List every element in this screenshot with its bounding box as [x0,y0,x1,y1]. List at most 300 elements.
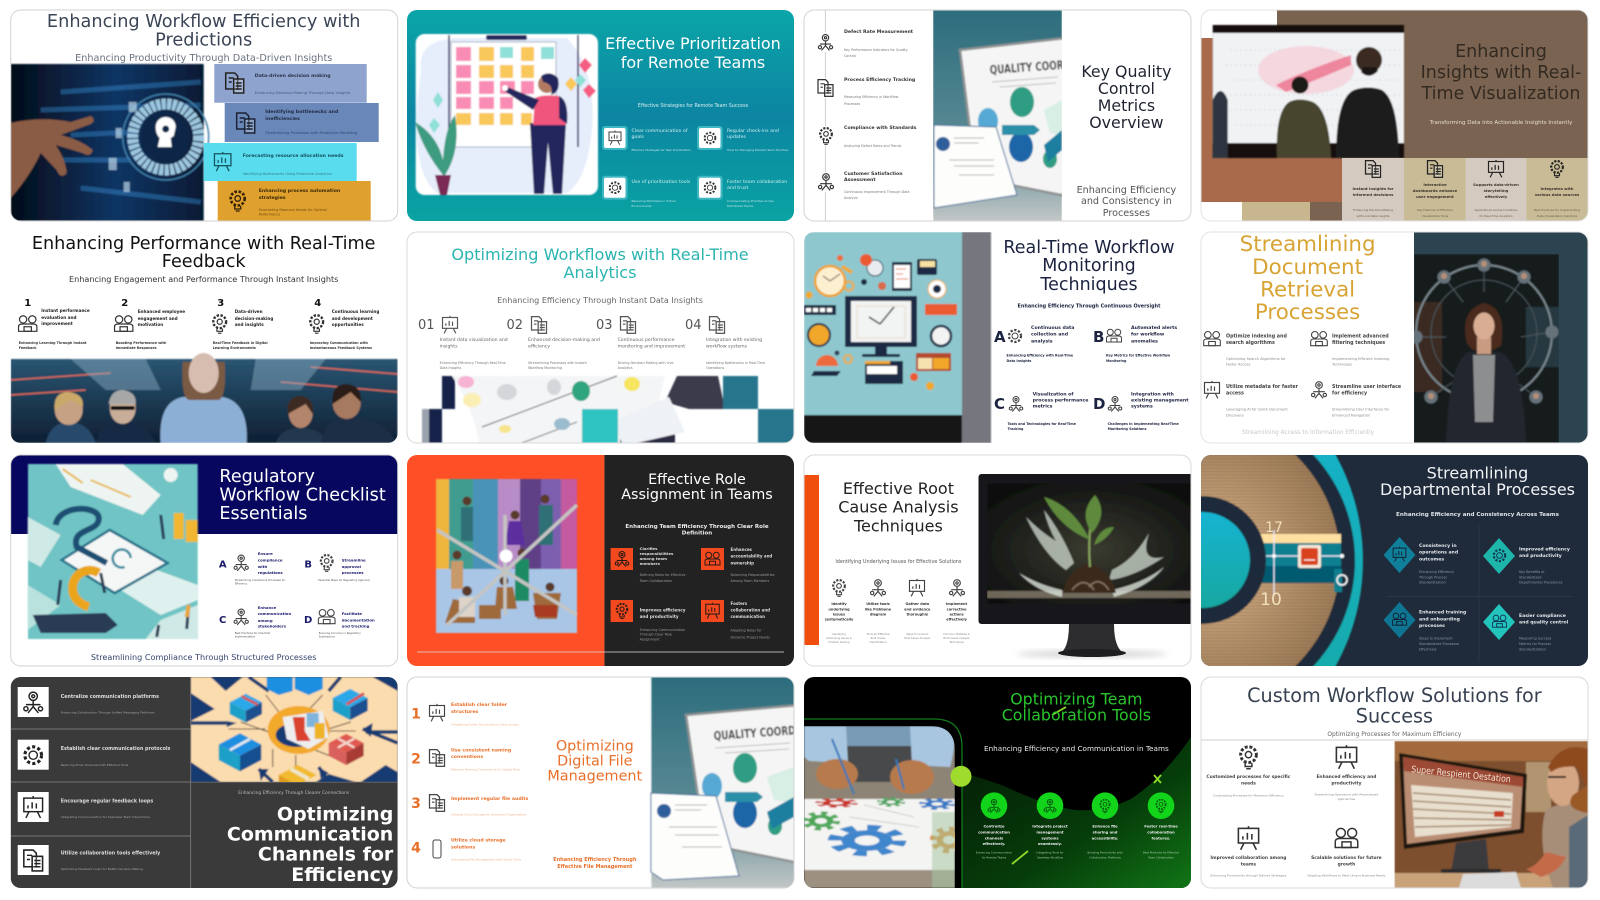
metric: customer satisfaction [816,171,910,200]
feature: data-driven storytelling: for Real-Time Analytics [1479,214,1513,218]
item: user interface [1312,382,1402,418]
illustration: clocks and monitor [804,232,991,443]
image: hand and AI circle [11,64,209,221]
step 03: Analytics [618,366,633,370]
item: fosters collaboration: collaboration and [730,608,770,613]
item 4: continuous learning: opportunities [332,322,364,327]
step: forecasting: Identifying Bottlenecks Using Predictive Analytics [243,172,332,176]
title: Optimizing [556,738,634,754]
step 04 [685,317,765,370]
subtitle: Processes [1103,208,1150,219]
step: forecasting: Forecasting resource allocation needs [243,153,344,159]
step: corrective actions: effectively [946,617,968,621]
item: indexing [1204,332,1287,367]
image: quality coordinator certificates [933,10,1066,221]
step 04: Integration with existing [706,337,762,343]
item 1: folder structures: Establish clear folder [451,702,508,708]
title: Enhancing Performance with Real-Time [32,234,375,254]
solution: scalable growth [1307,828,1386,878]
feature: data-driven storytelling: storytelling [1484,188,1509,193]
item B: approval [342,564,361,569]
item C: communication [258,611,291,616]
item D [1093,392,1189,431]
item: training: Steps to Implement [1419,637,1453,641]
item C: Tools and Technologies for Real-Time [1008,422,1077,426]
item A: Streamlining Compliance Processes for [235,578,286,582]
solution: scalable growth: Scalable solutions for future [1311,855,1382,861]
item: clarifies responsibilities: Defining Roles for Effective [640,573,686,577]
metric: customer satisfaction: Analysis [844,196,858,200]
monitor screen caption: Super Respient Oestation [1411,765,1511,785]
item 1: performance evaluation: improvement [41,321,73,326]
step 02 [506,317,600,370]
feature: various data sources: Data Visualization Solutions [1537,214,1578,218]
step: automation: Forecasting Resource Needs for Optimal [259,208,327,212]
channel: collaboration tools: Utilize collaboration tools effectively [61,850,161,856]
item: training: Enhanced training [1419,610,1466,616]
title: Real-Time Workflow [1003,238,1175,258]
step 02: Workflow Monitoring [528,366,562,370]
item D: D [304,615,312,626]
tool: enhance file sharing: Boosting Productivity with [1087,851,1123,855]
feature: interactive dashboards: Visualization Tools [1422,214,1449,218]
feature: various data sources [1526,158,1588,221]
item 1: folder structures: structures [451,709,479,715]
step: identify issues: issues [833,612,845,616]
feature: instant insights: Enhancing Decision-Making [1353,208,1393,212]
metric: defect rate: Control [844,54,856,58]
item 2: naming conventions: Effective Naming Conventions for Digital Files [451,768,520,772]
item: prioritization tools [602,176,691,208]
item: user interface: Streamline user interface [1332,384,1402,390]
item: user interface: for efficiency [1332,391,1368,397]
item: improves efficiency: Through Clear Role [639,633,672,637]
feature: interactive dashboards [1404,158,1466,221]
image: woman in data network [1410,254,1559,443]
step: data-driven decision making: Enhancing Decision-Making Through Data Insights [255,90,350,95]
item: clarifies responsibilities: members [640,561,661,566]
subtitle: Enhancing Efficiency Through Instant Data Insights [497,296,703,305]
item 3: data-driven insights: Learning Environments [213,346,256,350]
item 2: employee engagement: engagement and [138,316,178,321]
title: Optimizing Workflows with Real-Time [451,245,749,264]
step: bottlenecks: inefficiencies [265,116,300,122]
step: corrective actions [943,580,970,644]
item A: Ensure [258,551,273,556]
item: filtering: Techniques [1331,363,1352,367]
item B: Automated alerts [1131,325,1177,331]
title: Key Quality [1081,62,1171,81]
item 2: naming conventions: Use consistent naming [451,747,511,753]
item 4: cloud storage: solutions [451,844,475,850]
panel: real-time analytics slide [407,232,794,443]
item D: Challenges in Implementing Real-Time [1108,422,1180,426]
step: fishbone [865,580,892,644]
divider line [417,651,784,653]
panel: custom workflow solutions slide [1201,677,1588,888]
item B: Monitoring [1106,359,1127,363]
item: prioritization tools: Balancing Workloads in Virtual [632,199,676,203]
item B [304,555,370,582]
item: consistency: Enhancing Efficiency [1419,570,1454,574]
feature: various data sources: Best Practices for Implementing [1534,208,1580,212]
title: Essentials [219,504,307,524]
item: improves efficiency: and productivity [640,614,679,619]
item: clear communication: goals [632,134,645,140]
feature: interactive dashboards: dashboards enhance [1413,188,1458,193]
title: Control [1098,79,1155,98]
image: quality coordinator certificates: QUALITY COORD [713,723,796,743]
step 02: efficiency [528,344,550,350]
item 1: performance evaluation: Feedback [19,346,37,350]
graphic: wooden dial with teal rings [927,342,1363,778]
item C: Best Practices for Checklist [235,631,270,635]
item: fosters collaboration: communication [730,614,765,619]
item 1: folder structures: Simplifying Folder Structures for Easy Access [451,723,519,727]
step 04: workflow systems [706,344,748,350]
item 3: data-driven insights: 3 [217,298,224,309]
image: team watching holographic displays [11,353,398,443]
item B [1093,325,1177,363]
step: identify issues: underlying [828,607,850,611]
item 2: employee engagement: Enhanced employee [138,309,185,314]
item: user interface: Streamlining User Interfaces for [1332,407,1390,411]
dial labels: 10 [1260,590,1282,610]
step 02: Streamlining Processes with Instant [528,361,588,365]
title: Feedback [162,252,246,272]
panel: departmental processes slide [927,342,1588,778]
step: data-driven decision making: Data-driven decision making [255,73,331,79]
step 02: 02 [506,318,523,333]
item C: C [994,395,1005,413]
step 01: insights [440,344,458,350]
solution: scalable growth: growth [1338,861,1355,867]
item C: metrics [1033,404,1053,410]
solution: enhanced efficiency: Streamlining Operations with Personalized [1315,793,1378,797]
channel: communication protocols [18,740,171,770]
item: team collaboration: and trust [727,185,748,191]
step: fishbone: like Fishbone [865,607,892,611]
item 3: file audits [411,795,529,817]
item: clear communication: Effective Strategies for Task Prioritization [632,148,691,152]
panel: real-time feedback slide [11,232,398,443]
panel: document retrieval slide [1201,232,1588,443]
tool: real-time collaboration: Team Collaboration [1147,855,1174,859]
item: accountability: accountability and [730,554,772,559]
item B: B [1093,328,1104,346]
item: regular check-ins: Tools for Managing Remote Team Priorities [726,148,789,152]
step: gather evidence: thoroughly [906,612,929,616]
item D: Monitoring Solutions [1108,427,1147,431]
item B: anomalies [1131,338,1158,344]
step: automation: strategies [259,195,286,201]
subtitle: Enhancing Efficiency Through [553,857,637,863]
step: data-driven decision making [214,64,367,103]
item: compliance: Measuring Success [1519,637,1552,641]
item 4: cloud storage [411,838,521,862]
title: for Remote Teams [621,53,765,72]
solution: improved collaboration: Improved collaboration among [1210,855,1286,861]
tool: integrate project systems [1032,792,1068,859]
step 03: Continuous performance [618,337,675,343]
tool: integrate project systems: Integrating Tools for [1037,851,1064,855]
title: Monitoring [1042,256,1136,276]
feature: data-driven storytelling [1466,158,1526,221]
step: fishbone: diagram [870,612,887,616]
item 1: folder structures: 1 [411,706,421,722]
item A: Data Insights [1006,359,1031,363]
step: gather evidence: Ways to Conduct [906,632,928,636]
item B: Key Metrics for Effective Workflow [1106,354,1170,358]
title: Processes [1255,300,1360,325]
step: gather evidence: and evidence [904,607,931,611]
item B: Streamline [342,558,366,563]
item: consistency: Through Process [1418,575,1447,579]
subtitle: Identifying Underlying Issues for Effective Solutions [835,559,962,565]
item: clarifies responsibilities [611,546,686,583]
title: Channels for [258,844,394,866]
item 1: performance evaluation [19,298,90,350]
item 4: continuous learning: Continuous learning [332,309,379,314]
feature: data-driven storytelling: Supports data-driven [1473,182,1519,187]
item D: and tracking [342,624,370,629]
metric: customer satisfaction: Continuous Improvement Through Data [844,190,910,194]
item 4: continuous learning: and development [332,316,373,321]
panel: root cause analysis slide [804,455,1208,666]
item: training: and onboarding [1419,616,1460,622]
item: clarifies responsibilities: Team Collaboration [639,579,672,583]
metric: defect rate: Defect Rate Measurement [844,29,914,35]
tool: real-time collaboration: collaboration [1147,830,1175,834]
item B: processes [342,570,364,575]
item A: Continuous data [1031,325,1074,331]
item: filtering: Implementing Efficient Indexing [1332,357,1389,361]
item A: collection and [1031,332,1068,338]
step: identify issues: Identify [831,602,847,606]
item C [994,392,1088,431]
item D: D [1093,395,1105,413]
step 03 [596,317,685,370]
channel: centralize platforms [18,687,159,717]
illustration: person at sticky board [415,34,598,195]
item: prioritization tools: Environments [632,204,652,208]
item: consistency [1384,537,1458,585]
solution: customized processes [1206,747,1291,798]
item A: with [258,564,267,569]
subtitle: Definition [682,531,712,537]
item: accountability: Balancing Responsibilities [730,573,775,577]
step: gather evidence [904,579,931,640]
image: man at monitor in workshop [1394,741,1588,888]
step: forecasting [204,143,357,181]
item: prioritization tools: Use of prioritization tools [632,179,691,185]
title: Success [1356,704,1433,727]
feature: data-driven storytelling: effectively [1485,194,1508,199]
title: Document [1252,255,1363,280]
item 2: employee engagement: 2 [121,298,128,309]
panel: workflow predictions slide [11,10,398,221]
step: corrective actions: corrective [947,607,967,611]
item 1: folder structures [411,702,519,727]
title: Predictions [155,30,252,50]
metric: compliance: Compliance with Standards [844,125,917,131]
item: clear communication [602,126,691,152]
item: training: Standardized Processes [1419,642,1459,646]
subtitle: Optimizing Processes for Maximum Efficiency [1327,732,1462,738]
item 3: data-driven insights: decision-making [235,316,273,321]
image: quality coordinator certificates: QUALITY COOR [989,58,1064,77]
item 2: employee engagement: motivation [138,322,163,327]
metric: customer satisfaction: Assessment [844,177,876,183]
channel: feedback loops [18,792,153,822]
item: filtering: Implement advanced [1332,333,1389,339]
metric: defect rate [816,29,914,58]
solution: enhanced efficiency: Enhanced efficiency and [1316,774,1376,780]
item D: Ensuring Accuracy in Regulatory [319,631,361,635]
item 1: performance evaluation: 1 [24,298,31,309]
title: Assignment in Teams [621,487,773,503]
step 01: Enhancing Efficiency Through Real-Time [440,361,506,365]
channel: feedback loops: Integrating Communication for Seamless Team Interactions [61,815,150,819]
panel: key quality control metrics slide [804,10,1191,221]
title: Streamlining [1240,232,1376,257]
panel: workflow monitoring slide [804,232,1191,443]
title: Techniques [1039,275,1138,295]
item D: systems [1131,404,1153,410]
title: Analytics [563,263,637,282]
panel: team collaboration tools slide [804,677,1191,888]
item: metadata: Discovery [1226,414,1245,418]
feature: instant insights: Instant insights for [1352,186,1394,191]
tool: enhance file sharing: accessibility. [1092,836,1119,840]
item D: documentation [342,618,375,622]
tool: enhance file sharing: Collaboration Platforms [1089,855,1121,859]
item C [219,605,291,638]
item C: Tracking [1008,427,1024,431]
channel: feedback loops: Encourage regular feedback loops [61,798,153,804]
feature: interactive dashboards: Key Features of Effective [1417,208,1453,212]
item 2: naming conventions: conventions [451,754,483,760]
metric: process efficiency: Measuring Efficiency in Workflow [844,95,899,99]
channel: communication protocols: Reducing Email Overload with Effective Tools [61,763,129,767]
item: metadata: Utilize metadata for faster [1226,384,1299,390]
subtitle: Effective File Management [557,864,633,870]
subtitle: Enhancing Efficiency and Consistency Across Teams [1396,512,1560,518]
feature: various data sources: various data sources [1535,192,1580,197]
metric: process efficiency: Processes [844,102,861,106]
tagline: Streamlining Compliance Through Structured Processes [91,652,317,662]
item: accountability: Enhances [730,547,753,552]
title: Overview [1089,113,1164,132]
item C: among [258,618,273,623]
item 4: continuous learning: 4 [314,298,321,309]
item C: process performance [1033,398,1088,404]
item: team collaboration: Foster team collaboration [727,179,787,185]
title: Optimizing Team [1010,690,1143,709]
step: identify issues [825,580,854,644]
step: gather evidence: Gather data [905,602,930,606]
title: Effective Prioritization [605,34,781,53]
metric: compliance: Analyzing Defect Rates and Trends [844,144,902,148]
image: quality coordinator certificates [651,677,799,888]
title: Enhancing [1455,42,1547,62]
step: fishbone: Root Cause [871,636,886,640]
item D: existing management [1131,398,1189,404]
solution: customized processes: Customized processes for specific [1206,774,1291,780]
step: bottlenecks: Streamlining Processes with Predictive Modeling [265,130,358,135]
channel: communication protocols: Establish clear communication protocols [61,746,171,752]
step: automation [218,181,371,221]
item: user interface: Enhanced Navigation [1332,414,1370,418]
item A: A [994,328,1006,346]
tool: centralize channels: for Remote Teams [982,855,1007,859]
tool: centralize channels: channels [985,836,1004,840]
subtitle: Enhancing Efficiency and Communication in Teams [984,744,1169,753]
image: monitor with plant [978,474,1208,658]
step 01: Data Insights [440,366,462,370]
item 3: file audits: 3 [411,796,421,812]
title: Workflow Checklist [219,486,386,506]
title: Efficiency [291,864,394,886]
solution: scalable growth: Adapting Workflows to Meet Unique Business Needs [1307,874,1386,878]
title: Collaboration Tools [1002,705,1151,724]
item 2: employee engagement: Immediate Responses [116,346,157,350]
feature: instant insights: informed decisions [1353,192,1394,197]
item: accountability: Among Team Members [730,579,770,583]
subtitle: Enhancing Engagement and Performance Through Instant Insights [69,274,338,284]
tool: enhance file sharing: sharing and [1093,830,1118,834]
item 4: cloud storage: 4 [411,841,421,857]
tool: integrate project systems: Seamless Workflow [1037,855,1064,859]
item: metadata: access [1226,392,1244,397]
item: fosters collaboration: Fosters [730,601,748,606]
item: improved efficiency: and productivity [1519,553,1562,559]
item C: Implementation [235,634,256,638]
feature: data-driven storytelling: Applications Across Industries [1474,208,1518,212]
title: Communication [227,823,393,845]
item: accountability [701,547,775,583]
dial labels: 17 [1265,520,1283,536]
subtitle: Enhancing Team Efficiency Through Clear Role [625,524,769,530]
image: isometric parcels hub [191,677,398,799]
step 04: 04 [685,318,702,333]
item: clarifies responsibilities: Clarifies [640,546,658,551]
item A [219,551,286,586]
item: training [1384,602,1466,651]
item A: Enhancing Efficiency with Real-Time [1006,354,1074,358]
item: consistency: Consistency in [1419,543,1457,549]
tool: real-time collaboration: features. [1152,836,1171,840]
step 03: 03 [596,318,613,333]
solution: enhanced efficiency: productivity [1331,780,1362,786]
feature: instant insights [1342,158,1404,221]
item: indexing: search algorithms [1226,340,1275,346]
panel: remote team prioritization slide [407,10,794,221]
image: team with ropes [436,479,577,633]
item 4: cloud storage: Utilize cloud storage [451,838,506,844]
feature: interactive dashboards: Interactive [1423,182,1447,187]
item 2: naming conventions [411,747,520,772]
item 1: performance evaluation: Enhancing Learning Through Instant [19,341,87,345]
illustration: isometric compliance documents [28,464,198,639]
solution: enhanced efficiency [1315,745,1378,801]
tool: integrate project systems: seamlessly. [1038,842,1063,846]
item 4: continuous learning [310,298,379,350]
subtitle: Effective Strategies for Remote Team Success [638,103,749,109]
tool: real-time collaboration [1143,792,1179,859]
title: Insights with Real- [1421,63,1581,83]
item: metadata: Leveraging AI for Quick Document [1226,407,1288,411]
